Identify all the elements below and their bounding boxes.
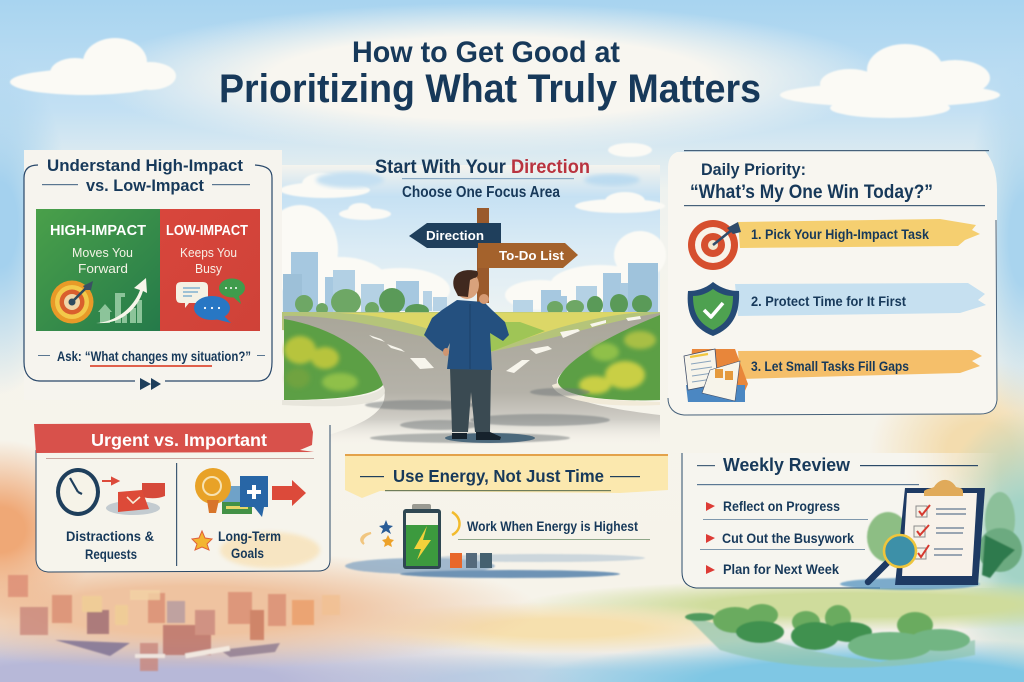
red header — [34, 423, 314, 453]
label: distractions: Requests — [85, 547, 137, 562]
list: Reflect on Progress — [723, 499, 840, 514]
clouds — [262, 143, 666, 313]
icon: target — [688, 220, 741, 270]
bottom-left skyline — [8, 575, 340, 671]
shadow — [840, 578, 980, 590]
icon: foliage — [867, 492, 1022, 578]
panel: weekly review — [681, 453, 1022, 590]
title: Prioritizing What Truly Matters — [219, 67, 761, 111]
trees — [295, 288, 652, 318]
top clouds right — [780, 44, 1000, 118]
left bush — [284, 319, 383, 400]
right bush — [558, 315, 660, 400]
step 3 — [684, 349, 982, 402]
icon: double play arrows — [140, 378, 161, 390]
lane marks — [369, 316, 641, 373]
head — [455, 271, 479, 299]
step 2: 2. Protect Time for It First — [751, 294, 906, 309]
signpost — [409, 208, 578, 303]
heading — [684, 161, 985, 206]
title: How to Get Good at — [352, 36, 620, 69]
ground smudges — [365, 388, 610, 443]
heading: start with your direction: Choose One Focus Area — [402, 184, 560, 201]
text: work when energy is highest: Work When Energy is Highest — [467, 518, 638, 534]
heading: Weekly Review — [723, 455, 851, 475]
high-impact card — [36, 209, 160, 331]
panel: use energy — [345, 454, 668, 578]
icon: shield — [688, 282, 739, 336]
heading: Understand High-Impact — [47, 156, 243, 175]
icon: star — [192, 531, 212, 550]
jacket — [424, 300, 509, 370]
yellow heading band — [345, 454, 668, 498]
label: long-term goals: Long-Term — [218, 529, 281, 544]
ask question: Ask: “What changes my situation?” — [57, 349, 251, 364]
list: Plan for Next Week — [723, 562, 839, 577]
label: distractions: Distractions & — [66, 529, 154, 544]
heading: “What’s My One Win Today?” — [690, 182, 933, 203]
icon: goals cluster — [195, 468, 268, 517]
heading: Daily Priority: — [701, 161, 806, 179]
step 3: 3. Let Small Tasks Fill Gaps — [751, 359, 909, 374]
heading: vs. Low-Impact — [86, 176, 204, 195]
high-impact card: Forward — [78, 261, 128, 276]
icon: stars and moon — [361, 512, 460, 547]
list: Cut Out the Busywork — [722, 531, 854, 546]
heading: start with your direction: Start With Your Direction — [375, 157, 590, 178]
icon: magnifier — [868, 535, 916, 582]
panel: urgent vs important — [34, 423, 330, 572]
sign: to-do list — [478, 243, 578, 268]
mini bars — [450, 553, 492, 568]
step 1 — [688, 219, 980, 270]
list — [700, 499, 868, 577]
high-impact card: HIGH-IMPACT — [50, 222, 146, 239]
icon: target — [50, 280, 94, 324]
icon: clipboard — [895, 480, 985, 585]
heading: start with your direction — [375, 157, 590, 201]
icon: documents — [684, 349, 748, 402]
icon: red arrow — [272, 480, 306, 506]
sign: direction: Direction — [426, 228, 484, 243]
bottom-right foliage — [685, 604, 975, 668]
low-impact card: Busy — [195, 261, 222, 276]
top clouds left — [10, 38, 176, 95]
step 2 — [688, 282, 986, 336]
panel: daily priority — [668, 150, 997, 415]
icon: envelopes — [102, 478, 165, 515]
icon: battery — [403, 504, 441, 569]
step 1: 1. Pick Your High-Impact Task — [751, 227, 929, 242]
yellow heading band: Use Energy, Not Just Time — [393, 466, 604, 486]
grass behind roads — [282, 312, 660, 352]
panel: understand high vs low impact — [24, 150, 282, 400]
high-impact card: Moves You — [72, 245, 133, 260]
icon: rising arrow — [96, 278, 147, 323]
low-impact card — [160, 209, 260, 331]
skyline — [283, 252, 658, 314]
roads — [284, 313, 660, 445]
icon: clock — [56, 468, 100, 516]
label: distractions — [66, 529, 154, 562]
red header: Urgent vs. Important — [91, 430, 267, 450]
label: long-term goals — [218, 529, 281, 561]
sky — [282, 165, 660, 323]
label: long-term goals: Goals — [231, 546, 264, 561]
hand on hip — [443, 348, 449, 356]
low-impact card: LOW-IMPACT — [166, 222, 248, 239]
shadow — [345, 554, 645, 578]
shoes — [452, 432, 501, 440]
icon: speech bubbles — [176, 278, 245, 323]
panel: direction crossroads scene — [262, 143, 666, 445]
heading — [42, 156, 250, 195]
low-impact card: Keeps You — [180, 245, 237, 260]
legs — [450, 368, 491, 432]
yellow field — [340, 312, 645, 352]
man thinking — [424, 270, 509, 440]
sign: direction — [409, 223, 501, 248]
title — [219, 36, 761, 111]
hand on chin — [479, 294, 489, 304]
watercolor corner — [220, 532, 320, 568]
sign: to-do list: To-Do List — [499, 248, 565, 263]
